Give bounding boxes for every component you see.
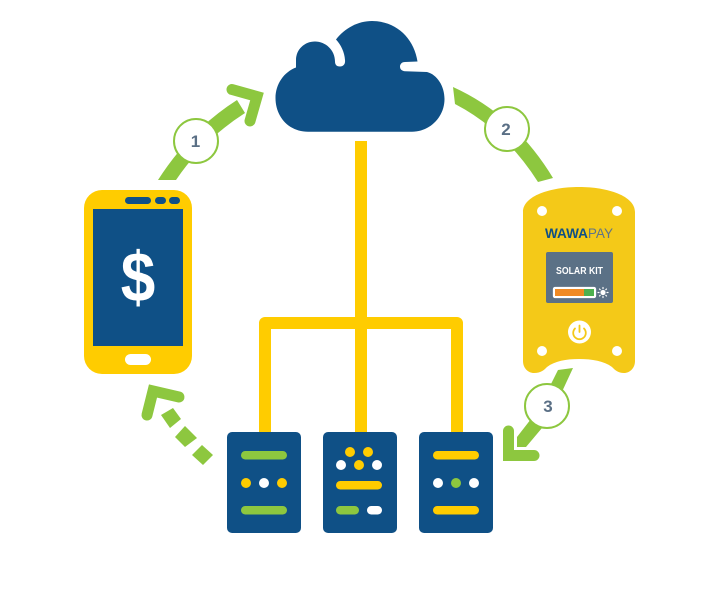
battery gauge <box>554 288 596 298</box>
step badge 3: 3 <box>543 397 553 416</box>
brand name: WAWAPAY <box>545 225 614 241</box>
arrow 3: device to servers <box>508 368 573 456</box>
step badge 1: 1 <box>191 132 200 151</box>
arrow 4: dashed return to phone <box>147 391 213 465</box>
server 1 <box>227 432 301 533</box>
step badge 3 <box>525 384 569 428</box>
solar kit panel <box>546 252 613 303</box>
icon: cloud <box>276 21 444 132</box>
device: WawaPay solar kit <box>523 187 635 373</box>
arrow 2: cloud to device <box>453 87 553 182</box>
server 2 <box>323 432 397 533</box>
dollar sign: $ <box>121 239 155 318</box>
icon: sun <box>598 288 608 298</box>
icon: power button <box>568 320 591 344</box>
server 3 <box>419 432 493 533</box>
icon: smartphone <box>84 190 192 374</box>
arrow 1: phone to cloud <box>158 90 257 180</box>
connector: yellow network lines <box>265 141 457 432</box>
step badge 2 <box>485 107 529 151</box>
step badge 2: 2 <box>501 120 511 139</box>
step badge 1 <box>174 119 218 163</box>
solar kit panel: SOLAR KIT <box>556 266 603 277</box>
